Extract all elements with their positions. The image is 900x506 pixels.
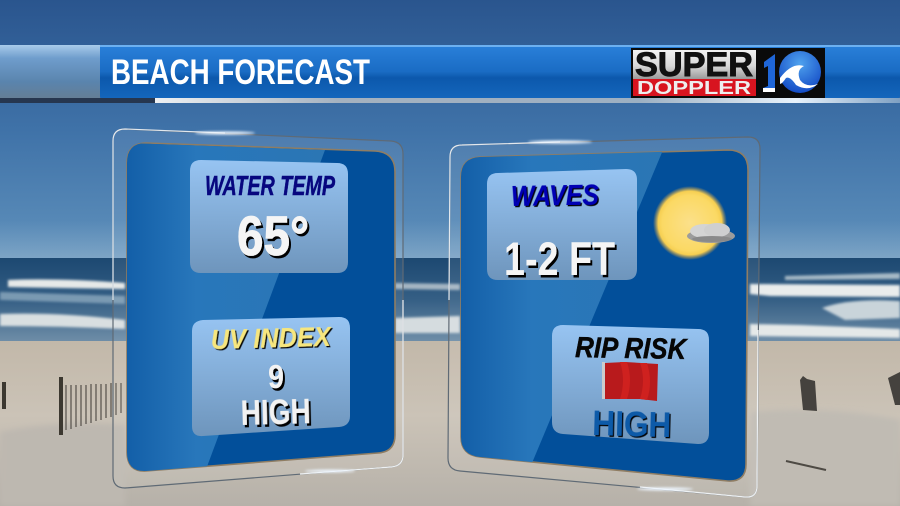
blue panel <box>127 143 395 471</box>
uv index label: UV INDEX <box>210 321 333 355</box>
uv level: HIGH <box>240 392 311 433</box>
sheen <box>461 150 663 463</box>
panel: left glass card <box>113 129 403 488</box>
icon: sun with cloud <box>653 186 735 260</box>
waves value: 1-2 FT <box>504 232 615 285</box>
header bar <box>0 45 900 103</box>
uv value: 9 <box>268 358 284 395</box>
blue panel <box>461 150 748 481</box>
heading: beach forecast: BEACH FORECAST <box>111 53 370 92</box>
rip level: HIGH <box>592 404 672 445</box>
logo: super doppler 10: SUPER <box>635 46 753 84</box>
logo: super doppler 10: DOPPLER <box>637 78 751 98</box>
waves label: WAVES <box>511 179 600 213</box>
logo: super doppler 10 <box>631 46 825 98</box>
water temp label: WATER TEMP <box>205 170 335 201</box>
water temp box <box>190 160 348 273</box>
sheen <box>127 143 325 472</box>
panel: right glass card <box>448 137 760 497</box>
waves box <box>487 169 637 285</box>
icon: red flag <box>602 362 658 401</box>
rip risk box <box>552 325 709 445</box>
rip risk label: RIP RISK <box>575 332 688 366</box>
water temp value: 65° <box>237 204 309 267</box>
uv index box <box>192 317 350 436</box>
